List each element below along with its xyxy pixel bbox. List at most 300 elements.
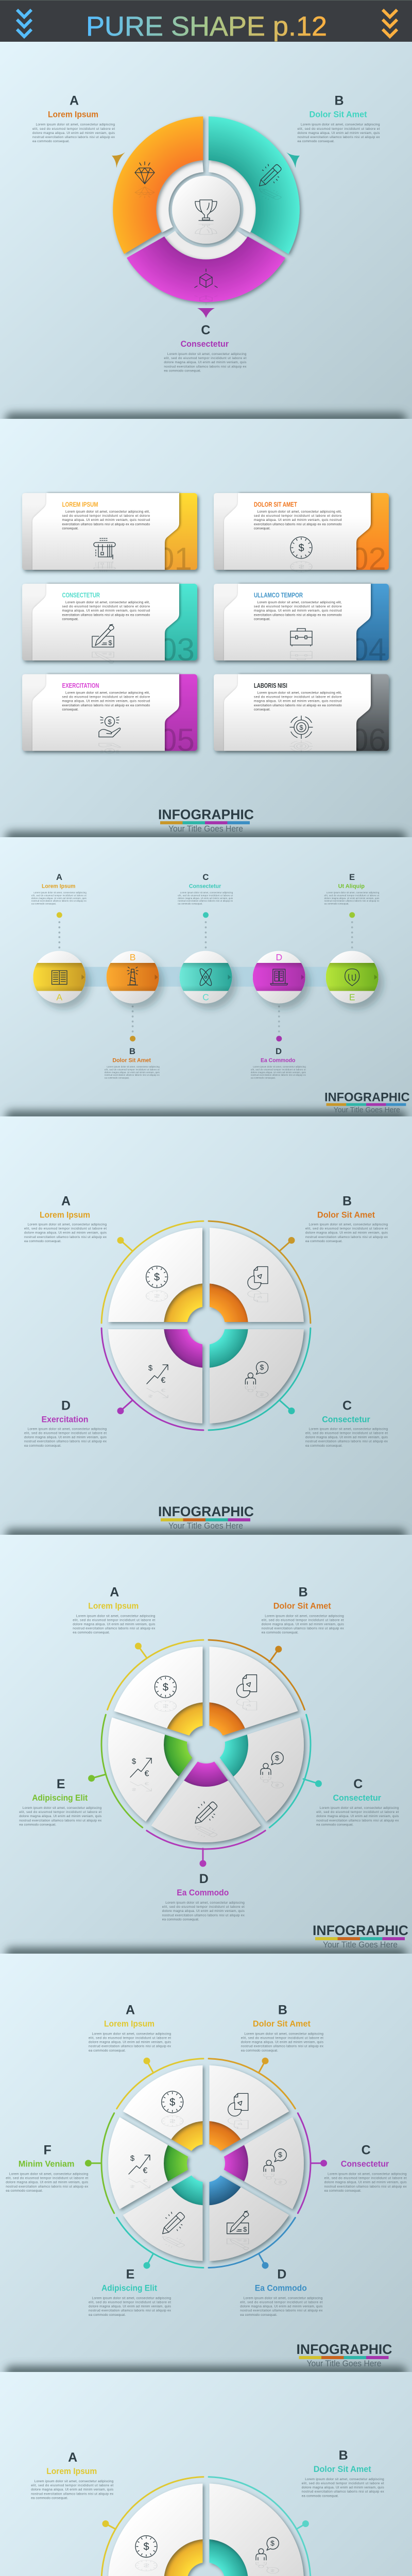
logo: infographic title: Your Title Goes Here — [168, 824, 243, 834]
card 01: exercitation ullamco laboris nisi ut aliquip ex ea commodo — [62, 522, 150, 526]
label: C Consectetur — [324, 2143, 407, 2193]
panel: header banner — [0, 0, 412, 42]
white segments — [108, 2065, 304, 2261]
label: C Consectetur: dolore magna aliqua. Ut enim ad minim veniam, quis — [316, 1815, 399, 1818]
label: C Consectetur — [178, 872, 233, 905]
label: A Lorem Ipsum: dolore magna aliqua. Ut enim ad minim veniam, quis — [32, 131, 115, 135]
circle D: D — [276, 952, 282, 962]
card 03: Lorem ipsum dolor sit amet, consectetur adipiscing elit, — [65, 601, 150, 604]
icon: dollar clock — [135, 2536, 157, 2571]
label: B Dolor Sit Amet — [105, 1046, 160, 1079]
label: D Ea Commodo: D — [199, 1872, 209, 1886]
inner coloured ring — [164, 1702, 248, 1787]
label: B Dolor Sit Amet: Dolor Sit Amet — [273, 1601, 331, 1611]
label: A Lorem Ipsum: elit, sed do eiusmod tempor incididunt ut labore et — [24, 1227, 107, 1231]
label: B Dolor Sit Amet: nostrud exercitation ullamco laboris nisi ut aliquip ex — [241, 2045, 324, 2048]
label: A Lorem Ipsum: dolore magna aliqua. Ut enim ad minim veniam, quis — [31, 2488, 113, 2492]
card 05: Lorem ipsum dolor sit amet, consectetur adipiscing elit, — [65, 691, 150, 694]
panel: five circles timeline section — [0, 837, 412, 1124]
label: B Dolor Sit Amet — [302, 2448, 384, 2498]
label: B Dolor Sit Amet: B — [299, 1585, 308, 1599]
card 06: magna aliqua. Ut enim ad minim veniam, quis nostrud — [254, 700, 342, 703]
label: B Dolor Sit Amet: Lorem ipsum dolor sit amet, consectetur adipiscing — [265, 1614, 344, 1618]
outer arcs and connectors — [101, 2477, 311, 2576]
label: A Lorem Ipsum: nostrud exercitation ullamco laboris nisi ut aliquip ex — [32, 135, 115, 139]
label: B Dolor Sit Amet: dolore magna aliqua. Ut enim ad minim veniam, quis — [305, 1231, 388, 1235]
outer arcs and connectors — [88, 2059, 324, 2268]
label: A Lorem Ipsum: dolore magna aliqua. Ut enim ad minim veniam, quis — [24, 1231, 107, 1235]
label: E Ut Aliquip: elit, sed do eiusmod tempor incididunt ut labore et — [324, 894, 380, 896]
label: E Adipiscing Elit: Adipiscing Elit — [101, 2283, 157, 2293]
card 01: LOREM IPSUM — [62, 501, 98, 509]
inner coloured ring — [164, 2121, 248, 2205]
label: C Consectetur: elit, sed do eiusmod tempor incididunt ut labore et — [324, 2177, 407, 2180]
label: E Ut Aliquip: dolore magna aliqua. Ut enim ad minim veniam, quis — [324, 897, 379, 900]
card 04: Lorem ipsum dolor sit amet, consectetur adipiscing elit, — [258, 601, 342, 604]
label: C Consectetur: C — [353, 1777, 363, 1791]
circle B — [107, 951, 159, 1004]
label: B Dolor Sit Amet: dolore magna aliqua. Ut enim ad minim veniam, quis — [105, 1071, 160, 1074]
label: B Dolor Sit Amet: Lorem ipsum dolor sit amet, consectetur adipiscing — [244, 2032, 323, 2036]
label: E Adipiscing Elit: Lorem ipsum dolor sit amet, consectetur adipiscing — [92, 2296, 171, 2300]
label: B Dolor Sit Amet: nostrud exercitation ullamco laboris nisi ut aliquip ex — [298, 135, 380, 139]
icon: orange chevrons — [383, 10, 397, 37]
label: A Lorem Ipsum: Lorem Ipsum — [88, 1601, 139, 1611]
label: F Minim Veniam — [6, 2143, 89, 2193]
panel: three segment wheel section — [0, 2372, 412, 2576]
icon: pie document — [248, 1266, 268, 1302]
label: D Ea Commodo: Ea Commodo — [261, 1058, 296, 1064]
label: D Ea Commodo: Ea Commodo — [177, 1888, 229, 1897]
label: C Consectetur: elit, sed do eiusmod tempor incididunt ut labore et — [178, 894, 233, 896]
label: C Consectetur: ea commodo consequat. — [324, 2189, 362, 2193]
card 05: sed do eiusmod tempor incididunt ut labore et dolore — [62, 696, 150, 699]
label: C Consectetur: elit, sed do eiusmod tempor incididunt ut labore et — [305, 1431, 388, 1435]
circle A: A — [56, 992, 62, 1003]
label: E Adipiscing Elit: dolore magna aliqua. Ut enim ad minim veniam, quis — [89, 2305, 171, 2309]
card 05: consequat. — [62, 708, 79, 711]
label: B Dolor Sit Amet: elit, sed do eiusmod tempor incididunt ut labore et — [105, 1068, 160, 1071]
label: D Ea Commodo: dolore magna aliqua. Ut enim ad minim veniam, quis — [162, 1909, 245, 1913]
card 06: Lorem ipsum dolor sit amet, consectetur adipiscing elit, — [258, 691, 342, 694]
circle A — [33, 951, 85, 1004]
label: A Lorem Ipsum: Lorem ipsum dolor sit amet, consectetur adipiscing — [36, 123, 115, 127]
label: B Dolor Sit Amet: dolore magna aliqua. Ut enim ad minim veniam, quis — [262, 1623, 344, 1626]
label: A Lorem Ipsum: ea commodo consequat. — [31, 903, 56, 905]
label: D Ea Commodo: D — [276, 1046, 282, 1056]
label: E Ut Aliquip: ea commodo consequat. — [324, 903, 349, 905]
logo: infographic title: INFOGRAPHIC — [297, 2342, 392, 2357]
icon: cube — [195, 269, 217, 305]
outer arcs and connectors — [92, 1640, 318, 1863]
label: C Consectetur: ea commodo consequat. — [305, 1444, 342, 1448]
circle E — [326, 951, 379, 1004]
label: B Dolor Sit Amet: Lorem ipsum dolor sit amet, consectetur adipiscing — [309, 1223, 388, 1226]
label: D Ea Commodo: Lorem ipsum dolor sit amet, consectetur adipiscing — [165, 1901, 245, 1905]
card 02: sed do eiusmod tempor incididunt ut labore et dolore — [254, 514, 342, 518]
label: B Dolor Sit Amet — [298, 94, 380, 143]
label: A Lorem Ipsum: ea commodo consequat. — [89, 2049, 126, 2053]
circle C: C — [202, 992, 209, 1003]
label: E Adipiscing Elit — [89, 2267, 171, 2317]
label: B Dolor Sit Amet — [305, 1194, 388, 1243]
label: B Dolor Sit Amet: Dolor Sit Amet — [317, 1211, 375, 1220]
label: C Consectetur: nostrud exercitation ullamco laboris nisi ut aliquip ex — [316, 1819, 399, 1822]
label: B Dolor Sit Amet: Dolor Sit Amet — [253, 2019, 311, 2028]
label: B Dolor Sit Amet: elit, sed do eiusmod tempor incididunt ut labore et — [241, 2036, 323, 2040]
label: B Dolor Sit Amet: B — [334, 94, 344, 108]
label: A Lorem Ipsum: dolore magna aliqua. Ut enim ad minim veniam, quis — [31, 897, 87, 900]
logo: infographic title: INFOGRAPHIC — [324, 1091, 410, 1105]
panel: pie section with three segments — [0, 42, 412, 426]
label: B Dolor Sit Amet: elit, sed do eiusmod tempor incididunt ut labore et — [298, 127, 380, 131]
label: D Ea Commodo: elit, sed do eiusmod tempor incididunt ut labore et — [162, 1905, 245, 1909]
label: B Dolor Sit Amet: B — [129, 1046, 135, 1056]
label: D Ea Commodo: D — [277, 2267, 286, 2281]
label: D Exercitation: nostrud exercitation ullamco laboris nisi ut aliquip ex — [24, 1440, 107, 1444]
label: A Lorem Ipsum: dolore magna aliqua. Ut enim ad minim veniam, quis — [89, 2041, 171, 2044]
card 03: sed do eiusmod tempor incididunt ut labore et dolore — [62, 605, 150, 608]
label: B Dolor Sit Amet: nostrud exercitation ullamco laboris nisi ut aliquip ex — [105, 1074, 160, 1076]
label: B Dolor Sit Amet: ea commodo consequat. — [105, 1077, 129, 1079]
label: D Ea Commodo — [240, 2267, 323, 2317]
label: A Lorem Ipsum: elit, sed do eiusmod tempor incididunt ut labore et — [73, 1618, 156, 1622]
card 05 — [22, 674, 197, 758]
label: A Lorem Ipsum: ea commodo consequat. — [31, 2496, 68, 2500]
card 02: exercitation ullamco laboris nisi ut aliquip ex ea commodo — [254, 522, 342, 526]
label: B Dolor Sit Amet: ea commodo consequat. — [241, 2049, 278, 2053]
label: E Ut Aliquip: nostrud exercitation ullamco laboris nisi ut aliquip ex — [324, 900, 380, 902]
label: C Consectetur: C — [362, 2143, 371, 2158]
label: D Ea Commodo: Ea Commodo — [255, 2283, 307, 2293]
wheel: four segments — [101, 1221, 311, 1430]
icon: chart currency — [147, 1364, 168, 1398]
card 06 — [214, 674, 389, 758]
label: D Ea Commodo: dolore magna aliqua. Ut enim ad minim veniam, quis — [240, 2305, 322, 2309]
wheel: three segments — [101, 2477, 311, 2576]
label: A Lorem Ipsum: ea commodo consequat. — [32, 140, 70, 143]
label: A Lorem Ipsum: Lorem ipsum dolor sit amet, consectetur adipiscing — [76, 1614, 156, 1618]
label: E Adipiscing Elit: ea commodo consequat. — [89, 2313, 126, 2317]
label: B Dolor Sit Amet: ea commodo consequat. — [298, 140, 335, 143]
label: D Exercitation: elit, sed do eiusmod tempor incididunt ut labore et — [24, 1431, 107, 1435]
card 04 — [214, 584, 389, 668]
dotted connectors — [58, 921, 353, 1032]
label: B Dolor Sit Amet: nostrud exercitation ullamco laboris nisi ut aliquip ex — [305, 1235, 388, 1239]
icon: pencil — [163, 2212, 184, 2247]
band behind circles — [59, 967, 352, 987]
card 03: magna aliqua. Ut enim ad minim veniam, quis nostrud — [62, 609, 150, 613]
label: E Adipiscing Elit: elit, sed do eiusmod tempor incididunt ut labore et — [89, 2300, 171, 2304]
card 04: 04 — [351, 632, 386, 668]
label: B Dolor Sit Amet: ea commodo consequat. — [305, 1240, 342, 1243]
title: PURE SHAPE p.12 — [86, 11, 327, 42]
label: A Lorem Ipsum: Lorem ipsum dolor sit amet, consectetur adipiscing — [28, 1223, 107, 1226]
card 04: exercitation ullamco laboris nisi ut aliquip ex ea commodo — [254, 613, 342, 617]
circle C — [179, 951, 232, 1004]
label: C Consectetur: nostrud exercitation ullamco laboris nisi ut aliquip ex — [305, 1440, 388, 1444]
label: C Consectetur: Consectetur — [333, 1793, 382, 1803]
logo: infographic title: INFOGRAPHIC — [158, 807, 254, 822]
label: F Minim Veniam: F — [44, 2143, 52, 2158]
logo: infographic title: Your Title Goes Here — [307, 2359, 381, 2368]
label: C Consectetur: ea commodo consequat. — [316, 1823, 354, 1826]
inner coloured ring — [164, 1283, 248, 1368]
label: C Consectetur: C — [201, 323, 210, 337]
label: C Consectetur: Lorem ipsum dolor sit amet, consectetur adipiscing — [180, 891, 233, 894]
arrow: C pointer — [197, 308, 215, 318]
label: B Dolor Sit Amet: ea commodo consequat. — [302, 2494, 339, 2498]
label: F Minim Veniam: dolore magna aliqua. Ut enim ad minim veniam, quis — [6, 2181, 88, 2184]
logo: infographic title: Your Title Goes Here — [334, 1106, 400, 1114]
white segments — [108, 1228, 304, 1423]
label: D Ea Commodo: ea commodo consequat. — [162, 1918, 199, 1921]
label: E Adipiscing Elit: ea commodo consequat. — [19, 1823, 56, 1826]
label: C Consectetur: dolore magna aliqua. Ut enim ad minim veniam, quis — [305, 1436, 388, 1439]
label: A Lorem Ipsum: Lorem ipsum dolor sit amet, consectetur adipiscing — [33, 891, 87, 894]
logo: infographic title — [158, 807, 254, 834]
card 05: 05 — [159, 722, 195, 758]
label: A Lorem Ipsum — [31, 2450, 114, 2500]
label: A Lorem Ipsum: elit, sed do eiusmod tempor incididunt ut labore et — [32, 127, 115, 131]
label: E Ut Aliquip: E — [349, 872, 355, 882]
label: C Consectetur: ea commodo consequat. — [164, 369, 201, 372]
white segments — [108, 2484, 304, 2576]
card 05: magna aliqua. Ut enim ad minim veniam, quis nostrud — [62, 700, 150, 703]
label: C Consectetur: Lorem ipsum dolor sit amet, consectetur adipiscing — [328, 2172, 407, 2176]
label: A Lorem Ipsum: A — [70, 94, 79, 108]
card 02: DOLOR SIT AMET — [254, 501, 297, 509]
label: C Consectetur: nostrud exercitation ullamco laboris nisi ut aliquip ex — [324, 2185, 407, 2189]
label: C Consectetur — [164, 323, 247, 372]
label: A Lorem Ipsum: A — [110, 1585, 119, 1599]
label: A Lorem Ipsum: Lorem Ipsum — [42, 884, 76, 890]
panel: six segment wheel section — [0, 1954, 412, 2379]
logo: infographic title — [297, 2342, 392, 2368]
label: A Lorem Ipsum: A — [56, 872, 62, 882]
label: D Exercitation: ea commodo consequat. — [24, 1444, 61, 1448]
label: D Ea Commodo: nostrud exercitation ullamco laboris nisi ut aliquip ex — [240, 2309, 323, 2313]
label: E Adipiscing Elit: Lorem ipsum dolor sit amet, consectetur adipiscing — [23, 1806, 102, 1810]
label: A Lorem Ipsum — [24, 1194, 107, 1243]
label: B Dolor Sit Amet: ea commodo consequat. — [262, 1631, 299, 1635]
label: C Consectetur: Consectetur — [181, 340, 229, 349]
label: C Consectetur: dolore magna aliqua. Ut enim ad minim veniam, quis — [178, 897, 233, 900]
wheel: five segments — [88, 1640, 322, 1867]
wheel: three coloured segments — [113, 116, 300, 302]
icon: user dollar — [261, 1752, 283, 1788]
icon: trophy — [195, 200, 217, 234]
card 03 — [22, 584, 197, 668]
logo: infographic title: Your Title Goes Here — [168, 1521, 243, 1531]
icon: diamond — [135, 162, 154, 198]
label: E Ut Aliquip: Lorem ipsum dolor sit amet, consectetur adipiscing — [327, 891, 380, 894]
label: C Consectetur: ea commodo consequat. — [178, 903, 202, 905]
card 06: sed do eiusmod tempor incididunt ut labore et dolore — [254, 696, 342, 699]
label: E Adipiscing Elit: E — [57, 1777, 65, 1791]
label: B Dolor Sit Amet: Dolor Sit Amet — [112, 1058, 151, 1064]
label: E Adipiscing Elit: E — [126, 2267, 134, 2281]
label: D Exercitation — [24, 1398, 107, 1448]
label: C Consectetur: Consectetur — [322, 1415, 370, 1424]
logo: infographic title: INFOGRAPHIC — [158, 1504, 254, 1519]
icon: pie document — [228, 2093, 248, 2129]
label: F Minim Veniam: Minim Veniam — [19, 2160, 75, 2169]
label: F Minim Veniam: ea commodo consequat. — [6, 2189, 43, 2193]
label: C Consectetur: elit, sed do eiusmod tempor incididunt ut labore et — [316, 1810, 399, 1814]
label: B Dolor Sit Amet: Lorem ipsum dolor sit amet, consectetur adipiscing — [301, 123, 380, 127]
circle E: E — [349, 992, 355, 1003]
label: C Consectetur: Consectetur — [341, 2160, 389, 2169]
icon: chart currency — [130, 1757, 151, 1792]
label: C Consectetur: C — [342, 1398, 352, 1413]
label: B Dolor Sit Amet: elit, sed do eiusmod tempor incididunt ut labore et — [262, 1618, 344, 1622]
card 02: 02 — [351, 541, 386, 577]
label: E Adipiscing Elit: elit, sed do eiusmod tempor incididunt ut labore et — [19, 1810, 101, 1814]
label: F Minim Veniam: elit, sed do eiusmod tempor incididunt ut labore et — [6, 2177, 88, 2180]
label: A Lorem Ipsum: elit, sed do eiusmod tempor incididunt ut labore et — [89, 2036, 171, 2040]
label: C Consectetur: Lorem ipsum dolor sit amet, consectetur adipiscing — [167, 352, 247, 356]
label: A Lorem Ipsum: nostrud exercitation ullamco laboris nisi ut aliquip ex — [89, 2045, 171, 2048]
label: A Lorem Ipsum: elit, sed do eiusmod tempor incididunt ut labore et — [31, 894, 87, 896]
label: A Lorem Ipsum: nostrud exercitation ullamco laboris nisi ut aliquip ex — [73, 1627, 156, 1631]
label: B Dolor Sit Amet: Lorem ipsum dolor sit amet, consectetur adipiscing — [305, 2478, 384, 2481]
label: D Exercitation: Lorem ipsum dolor sit amet, consectetur adipiscing — [28, 1427, 107, 1431]
label: A Lorem Ipsum — [73, 1585, 156, 1635]
icon: pencil — [260, 164, 281, 200]
label: C Consectetur: C — [202, 872, 209, 882]
card 04: ULLAMCO TEMPOR — [254, 592, 303, 599]
label: D Ea Commodo: nostrud exercitation ullamco laboris nisi ut aliquip ex — [251, 1074, 306, 1076]
label: B Dolor Sit Amet — [241, 2003, 324, 2053]
label: A Lorem Ipsum — [31, 872, 87, 905]
label: A Lorem Ipsum: A — [61, 1194, 71, 1209]
card 02: Lorem ipsum dolor sit amet, consectetur adipiscing elit, — [258, 510, 342, 514]
icon: pie document — [237, 1675, 256, 1710]
icon: blue chevrons — [17, 10, 31, 37]
wheel: six segments — [85, 2058, 327, 2269]
circle D — [253, 951, 305, 1004]
label: A Lorem Ipsum: A — [68, 2450, 77, 2465]
label: D Exercitation: dolore magna aliqua. Ut enim ad minim veniam, quis — [24, 1436, 107, 1439]
label: D Ea Commodo: elit, sed do eiusmod tempor incididunt ut labore et — [251, 1068, 306, 1071]
card 03: 03 — [159, 632, 195, 668]
label: D Ea Commodo — [162, 1872, 245, 1921]
label: E Adipiscing Elit: Adipiscing Elit — [32, 1793, 88, 1803]
card 02 — [214, 493, 389, 577]
label: D Ea Commodo: elit, sed do eiusmod tempor incididunt ut labore et — [240, 2300, 323, 2304]
icon: pencil — [195, 1802, 217, 1837]
label: B Dolor Sit Amet: B — [278, 2003, 287, 2017]
label: C Consectetur: nostrud exercitation ullamco laboris nisi ut aliquip ex — [164, 365, 247, 368]
label: B Dolor Sit Amet: nostrud exercitation ullamco laboris nisi ut aliquip ex — [262, 1627, 344, 1631]
arrow: A pointer — [112, 152, 125, 168]
label: B Dolor Sit Amet: dolore magna aliqua. Ut enim ad minim veniam, quis — [302, 2486, 384, 2489]
label: D Ea Commodo: ea commodo consequat. — [251, 1077, 276, 1079]
panel: six cards section — [0, 419, 412, 844]
label: D Ea Commodo: nostrud exercitation ullamco laboris nisi ut aliquip ex — [162, 1913, 245, 1917]
icon: chart currency — [129, 2154, 150, 2189]
card 06: consequat. — [254, 708, 270, 711]
label: A Lorem Ipsum: Lorem Ipsum — [40, 1211, 90, 1220]
card 04: magna aliqua. Ut enim ad minim veniam, quis nostrud — [254, 609, 342, 613]
icon: dollar clock — [154, 1676, 176, 1711]
label: F Minim Veniam: Lorem ipsum dolor sit amet, consectetur adipiscing — [9, 2172, 89, 2176]
white segments — [108, 1647, 304, 1842]
outer arcs and connectors — [101, 1221, 311, 1430]
label: A Lorem Ipsum: Lorem Ipsum — [104, 2019, 154, 2028]
card 02: consequat. — [254, 527, 270, 530]
centre disc — [172, 176, 240, 244]
logo: infographic title — [158, 1504, 254, 1531]
card 03: exercitation ullamco laboris nisi ut aliquip ex ea commodo — [62, 613, 150, 617]
connector end dots — [57, 912, 355, 1042]
label: E Ut Aliquip: Ut Aliquip — [338, 884, 365, 890]
card 05: exercitation ullamco laboris nisi ut aliquip ex ea commodo — [62, 704, 150, 707]
label: C Consectetur: elit, sed do eiusmod tempor incididunt ut labore et — [164, 357, 247, 360]
label: D Ea Commodo: Lorem ipsum dolor sit amet, consectetur adipiscing — [244, 2296, 323, 2300]
inner coloured ring — [164, 2539, 248, 2576]
label: A Lorem Ipsum: Lorem ipsum dolor sit amet, consectetur adipiscing — [92, 2032, 171, 2036]
label: C Consectetur: dolore magna aliqua. Ut enim ad minim veniam, quis — [164, 361, 246, 364]
label: E Adipiscing Elit: nostrud exercitation ullamco laboris nisi ut aliquip ex — [89, 2309, 171, 2313]
card 01: Lorem ipsum dolor sit amet, consectetur adipiscing elit, — [65, 510, 150, 514]
label: B Dolor Sit Amet: Dolor Sit Amet — [309, 110, 367, 120]
label: A Lorem Ipsum: Lorem ipsum dolor sit amet, consectetur adipiscing — [35, 2480, 114, 2483]
label: C Consectetur: dolore magna aliqua. Ut enim ad minim veniam, quis — [324, 2181, 407, 2184]
label: A Lorem Ipsum: ea commodo consequat. — [73, 1631, 110, 1635]
card 06: LABORIS NISI — [254, 682, 287, 689]
label: B Dolor Sit Amet: elit, sed do eiusmod tempor incididunt ut labore et — [305, 1227, 388, 1231]
label: A Lorem Ipsum: dolore magna aliqua. Ut enim ad minim veniam, quis — [73, 1623, 155, 1626]
segment: purple — [127, 236, 285, 302]
logo: infographic title: Your Title Goes Here — [323, 1940, 398, 1950]
logo: infographic title — [313, 1923, 408, 1950]
label: B Dolor Sit Amet: Dolor Sit Amet — [314, 2465, 371, 2474]
card 03: consequat. — [62, 617, 79, 621]
circle B: B — [130, 952, 135, 962]
logo: infographic title — [324, 1091, 410, 1114]
label: F Minim Veniam: nostrud exercitation ullamco laboris nisi ut aliquip ex — [6, 2185, 89, 2189]
card 03: CONSECTETUR — [62, 592, 100, 599]
label: B Dolor Sit Amet — [262, 1585, 344, 1635]
card 06: 06 — [351, 722, 386, 758]
label: D Ea Commodo — [251, 1046, 306, 1079]
icon: user dollar — [264, 2149, 286, 2185]
label: A Lorem Ipsum: A — [126, 2003, 135, 2017]
card 06: exercitation ullamco laboris nisi ut aliquip ex ea commodo — [254, 704, 342, 707]
label: D Ea Commodo: dolore magna aliqua. Ut enim ad minim veniam, quis — [251, 1071, 306, 1074]
label: A Lorem Ipsum: nostrud exercitation ullamco laboris nisi ut aliquip ex — [24, 1235, 107, 1239]
label: E Adipiscing Elit: nostrud exercitation ullamco laboris nisi ut aliquip ex — [19, 1819, 102, 1822]
label: D Ea Commodo: Lorem ipsum dolor sit amet, consectetur adipiscing — [253, 1065, 306, 1068]
label: A Lorem Ipsum — [89, 2003, 171, 2053]
label: C Consectetur: Lorem ipsum dolor sit amet, consectetur adipiscing — [320, 1806, 399, 1810]
label: D Exercitation: D — [61, 1398, 71, 1413]
card 04: consequat. — [254, 617, 270, 621]
card 05: EXERCITATION — [62, 682, 99, 689]
card 01: 01 — [157, 541, 192, 577]
label: B Dolor Sit Amet: nostrud exercitation ullamco laboris nisi ut aliquip ex — [302, 2490, 384, 2494]
label: B Dolor Sit Amet: B — [342, 1194, 352, 1209]
card 01 — [22, 493, 197, 577]
label: E Adipiscing Elit: dolore magna aliqua. Ut enim ad minim veniam, quis — [19, 1815, 101, 1818]
label: E Ut Aliquip — [324, 872, 380, 905]
card 02: magna aliqua. Ut enim ad minim veniam, quis nostrud — [254, 518, 342, 522]
centre ring — [162, 166, 250, 253]
label: E Adipiscing Elit — [19, 1777, 102, 1826]
label: A Lorem Ipsum — [32, 94, 115, 143]
